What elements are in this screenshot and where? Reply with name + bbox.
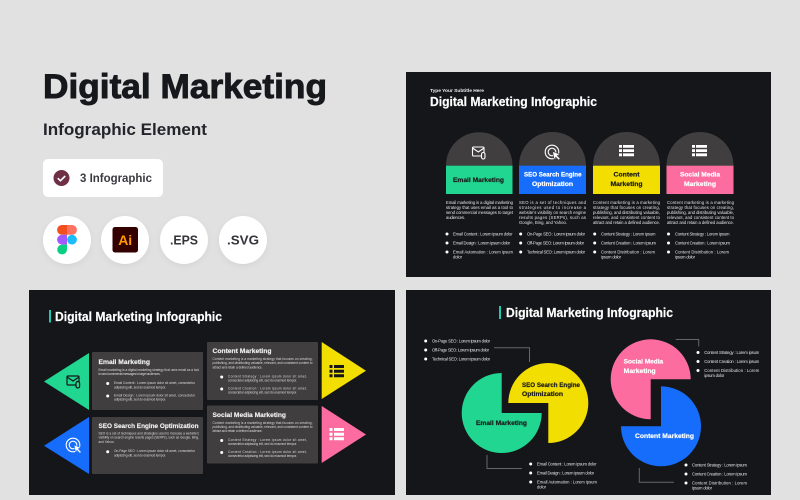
card: content marketing: publishing, and distributing valuable, relevant, and consistent content to bbox=[212, 361, 313, 365]
card: seo: SEO is a set of techniques and strategies used to increase a website's bbox=[98, 432, 199, 436]
panel title with accent bar: Digital Marketing Infographic bbox=[506, 306, 673, 320]
card: social media marketing: Content Strategy : Lorem ipsum dolor sit amet, bbox=[228, 438, 307, 442]
main heading: Digital Marketing bbox=[43, 68, 327, 106]
card: content marketing: consectetur adipiscing elit, sed do eiusmod tempor. bbox=[228, 379, 297, 383]
list: email items: dolor bbox=[537, 484, 547, 489]
pie: seo: SEO Search Engine bbox=[522, 382, 580, 389]
badge: 3 infographic: 3 Infographic bbox=[80, 173, 153, 185]
column: seo: Google, Bing, and Yahoo. bbox=[519, 220, 567, 225]
column: social media marketing: publishing, and distributing valuable, bbox=[667, 210, 734, 215]
pie: seo: Optimization bbox=[522, 391, 563, 398]
column: email marketing: Email Automation : Lorem ipsum bbox=[453, 249, 514, 254]
card: content marketing: Content Creation : Lorem ipsum dolor sit amet, bbox=[228, 386, 307, 390]
column: seo: Off-Page SEO: Lorem ipsum dolor bbox=[527, 240, 585, 245]
pie: content marketing bbox=[621, 386, 701, 466]
list: social media items: Content Strategy : Lorem ipsum bbox=[704, 350, 760, 355]
list: content items: Content Creation : Lorem ipsum bbox=[692, 471, 748, 476]
column: content marketing: Marketing bbox=[610, 181, 643, 188]
column: seo: Optimization bbox=[532, 181, 573, 188]
column: seo: website's visibility on search engine bbox=[519, 210, 587, 215]
column: social media marketing: Content Distribution : Lorem bbox=[675, 249, 730, 254]
card: content marketing: consectetur adipiscing elit, sed do eiusmod tempor. bbox=[228, 391, 297, 395]
icon: eps format bbox=[160, 216, 208, 264]
card: seo: visibility on search engine results pages (SERPs), such as Google, Bing, bbox=[98, 436, 199, 440]
card: email marketing: adipiscing elit, sed do eiusmod tempor. bbox=[114, 386, 166, 390]
icon: svg format: .SVG bbox=[227, 234, 259, 248]
column: social media marketing: Content Creation : Lorem ipsum bbox=[675, 240, 730, 245]
card: social media marketing: Content Creation : Lorem ipsum dolor sit amet, bbox=[228, 450, 307, 454]
list: content items: Content Strategy : Lorem ipsum bbox=[692, 462, 748, 467]
list: social media items bbox=[696, 350, 760, 378]
card: social media marketing: Content marketing is a marketing strategy that focuses on creating, bbox=[212, 421, 313, 425]
pie: email marketing bbox=[462, 373, 542, 453]
card: seo: On-Page SEO : Lorem ipsum dolor sit amet, consectetur bbox=[114, 449, 196, 453]
card: social media marketing: Social Media Marketing bbox=[212, 412, 286, 419]
list: email items: Email Automation : Lorem ipsum bbox=[537, 479, 598, 484]
column: social media marketing: Marketing bbox=[684, 181, 716, 188]
card: content marketing: attract and retain a defined audience. bbox=[212, 365, 263, 369]
panel: arch columns infographic bbox=[406, 72, 771, 277]
column: email marketing: audiences. bbox=[446, 215, 465, 220]
column: email marketing: Email Design : Lorem ipsum dolor bbox=[453, 240, 511, 245]
column: seo: SEO is a set of techniques and bbox=[519, 200, 587, 205]
column: content marketing: Content Strategy : Lorem ipsum bbox=[601, 231, 656, 236]
icon: svg format bbox=[219, 216, 267, 264]
card: social media marketing: attract and retain a defined audience. bbox=[212, 429, 263, 433]
card: seo: and Yahoo. bbox=[98, 440, 115, 444]
column: seo: results pages (SERPs), such as bbox=[519, 215, 586, 220]
column: content marketing: strategy that focuses on creating, bbox=[593, 205, 660, 210]
column: email marketing: dolor bbox=[453, 254, 463, 259]
column: content marketing: attract and retain a defined audience. bbox=[593, 220, 660, 225]
column: content marketing: ipsum dolor bbox=[601, 254, 622, 259]
column: content marketing: Content Creation : Lorem ipsum bbox=[601, 240, 656, 245]
column: social media marketing: strategy that focuses on creating, bbox=[667, 205, 734, 210]
card: content marketing: Content marketing is a marketing strategy that focuses on creating, bbox=[212, 357, 313, 361]
pie: seo bbox=[508, 363, 588, 443]
card: social media marketing: consectetur adipiscing elit, sed do eiusmod tempor. bbox=[228, 442, 297, 446]
icon: illustrator bbox=[101, 216, 149, 264]
column: content marketing: relevant, and consistent content to bbox=[593, 215, 661, 220]
pie: content marketing: Content Marketing bbox=[635, 433, 694, 440]
column: email marketing: Email Content : Lorem ipsum dolor bbox=[453, 231, 513, 236]
card: email marketing: adipiscing elit, sed do eiusmod tempor. bbox=[114, 398, 166, 402]
column: seo: strategies used to increase a bbox=[519, 205, 587, 210]
icon: illustrator: Ai bbox=[118, 232, 132, 248]
list: content items: ipsum dolor bbox=[692, 485, 713, 490]
card: email marketing: Email marketing is a digital marketing strategy that uses email as a tool bbox=[98, 368, 199, 372]
column: social media marketing: Content marketing is a marketing bbox=[667, 200, 735, 205]
list: seo items: Technical SEO: Lorem ipsum dolor bbox=[432, 356, 491, 361]
column: email marketing bbox=[446, 132, 514, 259]
card: email marketing: Email Design : Lorem ipsum dolor sit amet, consectetur bbox=[114, 394, 196, 398]
card: seo: SEO Search Engine Optimization bbox=[98, 423, 199, 430]
badge: 3 infographic bbox=[43, 159, 163, 197]
list: seo items bbox=[424, 338, 491, 361]
column: email marketing: strategy that uses email as a tool to bbox=[446, 205, 514, 210]
list: content items bbox=[684, 462, 748, 490]
column: seo bbox=[519, 132, 587, 254]
left intro column bbox=[43, 68, 327, 264]
card: social media marketing: consectetur adipiscing elit, sed do eiusmod tempor. bbox=[228, 454, 297, 458]
column: social media marketing: ipsum dolor bbox=[675, 254, 696, 259]
list: social media items: Content Creation : Lorem ipsum bbox=[704, 359, 760, 364]
pie: social media marketing: Social Media bbox=[624, 358, 664, 366]
column: social media marketing: Content Strategy : Lorem ipsum bbox=[675, 231, 730, 236]
card: email marketing bbox=[44, 352, 203, 410]
column: social media marketing: relevant, and consistent content to bbox=[667, 215, 735, 220]
card: email marketing: Email Marketing bbox=[98, 359, 150, 366]
card: content marketing: Content Marketing bbox=[212, 348, 272, 355]
column: email marketing: Email marketing is a digital marketing bbox=[446, 200, 514, 205]
list: email items: Email Content : Lorem ipsum dolor bbox=[537, 461, 597, 466]
card: email marketing: Email Content : Lorem ipsum dolor sit amet, consectetur bbox=[114, 381, 196, 385]
card: email marketing: to send commercial messages to target audiences. bbox=[98, 372, 161, 376]
sub heading: Infographic Element bbox=[43, 121, 208, 139]
card: seo bbox=[44, 417, 203, 474]
icon: figma bbox=[43, 216, 91, 264]
column: social media marketing: attract and retain a defined audience. bbox=[667, 220, 734, 225]
pie: social media marketing: Marketing bbox=[624, 368, 656, 375]
list: seo items: Off-Page SEO: Lorem ipsum dolor bbox=[432, 347, 490, 352]
panel title: Digital Marketing Infographic bbox=[430, 95, 597, 109]
panel: pie shapes infographic bbox=[406, 290, 771, 495]
column: content marketing: Content bbox=[614, 172, 640, 179]
pie: social media marketing bbox=[611, 339, 691, 419]
column: content marketing: Content Distribution : Lorem bbox=[601, 249, 656, 254]
icon: eps format: .EPS bbox=[170, 234, 198, 248]
list: social media items: Content Distribution : Lorem bbox=[704, 368, 760, 373]
column: social media marketing: Social Media bbox=[680, 172, 721, 179]
card: content marketing: Content Strategy : Lorem ipsum dolor sit amet, bbox=[228, 374, 307, 378]
pie: email marketing: Email Marketing bbox=[476, 420, 527, 427]
column: seo: On-Page SEO : Lorem ipsum dolor bbox=[527, 231, 586, 236]
list: content items: Content Distribution : Lorem bbox=[692, 480, 748, 485]
column: seo: Technical SEO: Lorem ipsum dolor bbox=[527, 249, 586, 254]
column: content marketing bbox=[593, 132, 661, 259]
column: email marketing: send commercial messages to target bbox=[446, 210, 514, 215]
card: social media marketing bbox=[207, 406, 366, 464]
panel subtitle: Type Your Subtitle Here bbox=[430, 88, 484, 93]
panel: triangle cards infographic bbox=[29, 290, 395, 495]
column: social media marketing bbox=[666, 132, 735, 259]
list: email items bbox=[529, 461, 598, 489]
card: seo: adipiscing elit, sed do eiusmod tempor. bbox=[114, 453, 166, 457]
column: email marketing: Email Marketing bbox=[453, 177, 504, 184]
column: content marketing: Content marketing is a marketing bbox=[593, 200, 661, 205]
card: social media marketing: publishing, and distributing valuable, relevant, and consistent content to bbox=[212, 425, 313, 429]
card: content marketing bbox=[207, 342, 366, 400]
panel title with accent bar: Digital Marketing Infographic bbox=[55, 310, 222, 324]
list: email items: Email Design : Lorem ipsum dolor bbox=[537, 470, 595, 475]
list: seo items: On-Page SEO : Lorem ipsum dolor bbox=[432, 338, 491, 343]
column: seo: SEO Search Engine bbox=[524, 172, 582, 179]
column: content marketing: publishing, and distributing valuable, bbox=[593, 210, 660, 215]
list: social media items: ipsum dolor bbox=[704, 373, 725, 378]
